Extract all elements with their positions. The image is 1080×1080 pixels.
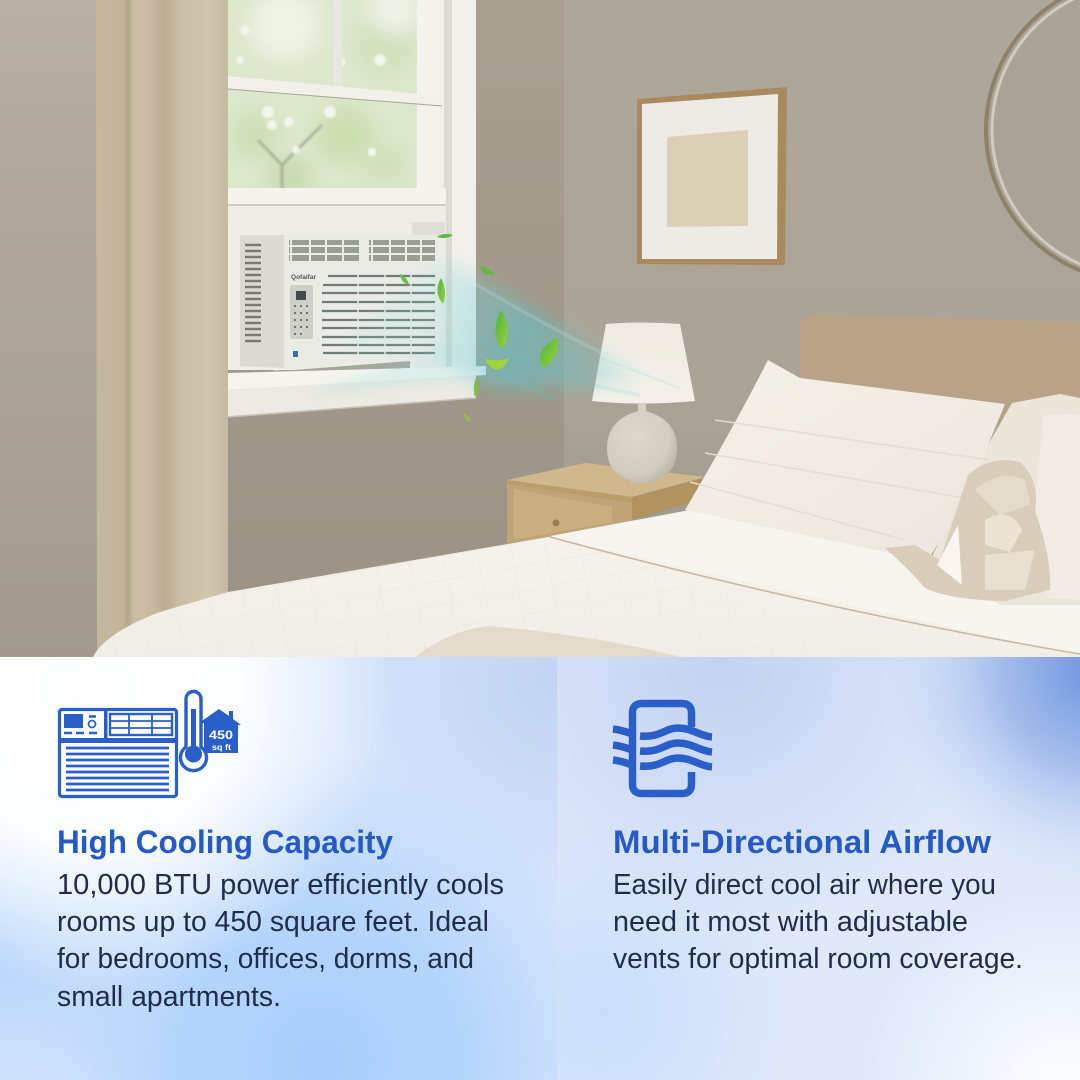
- body text: Easily direct cool air where you: [613, 869, 996, 901]
- vent outline: [632, 704, 692, 794]
- quilting: [93, 535, 900, 657]
- window sill: [228, 366, 486, 417]
- meeting rail: [228, 76, 417, 104]
- leaf: [485, 358, 509, 370]
- throw blanket: [415, 626, 680, 657]
- lower vent lines: [66, 748, 169, 790]
- glass with blurred trees: [228, 0, 417, 188]
- brand logo: Qofaifar: [291, 274, 316, 281]
- curtain: [96, 0, 228, 650]
- pillow: [685, 360, 1005, 557]
- air conditioner unit: [240, 235, 437, 376]
- house: [199, 709, 241, 753]
- sheet fold: [550, 510, 1080, 655]
- wall art frame: [637, 87, 787, 265]
- centre wall under window: [228, 0, 564, 592]
- white mat: [642, 94, 778, 259]
- flying leaves: [400, 234, 558, 422]
- heading: Multi-Directional Airflow: [613, 824, 991, 860]
- right wall: [564, 0, 1080, 556]
- body text: need it most with adjustable: [613, 906, 968, 938]
- side accordion: [412, 222, 445, 236]
- body text: rooms up to 450 square feet. Ideal: [57, 906, 489, 938]
- main grille: [322, 276, 435, 353]
- duvet: [93, 536, 1080, 657]
- leaf: [400, 274, 409, 285]
- left wall: [0, 0, 98, 657]
- vase: [607, 404, 677, 483]
- icon: air conditioner with thermometer and house: [59, 692, 241, 796]
- leaf: [479, 265, 494, 275]
- bottom lip: [278, 361, 410, 372]
- display: [64, 714, 83, 728]
- headboard: [800, 314, 1080, 420]
- control panel: [290, 285, 313, 339]
- lower sash bottom rail: [228, 188, 446, 204]
- icon: airflow through vent: [613, 704, 712, 794]
- shade: [592, 322, 695, 404]
- side vents: [245, 245, 261, 341]
- leaf: [437, 278, 445, 304]
- panel background: [0, 657, 557, 1080]
- nightstand: [507, 463, 705, 543]
- house sublabel: sq ft: [212, 743, 231, 752]
- panel: bedroom photo scene: [0, 0, 1080, 657]
- table lamp: [592, 322, 695, 483]
- leaf: [437, 234, 453, 238]
- round mirror: [986, 0, 1080, 282]
- window frame: [228, 0, 444, 370]
- front: [507, 484, 633, 543]
- plush toy: [885, 460, 1050, 601]
- top vents: [110, 714, 172, 735]
- body text: vents for optimal room coverage.: [613, 943, 1023, 975]
- body text: [613, 869, 1023, 975]
- energy badge: [293, 351, 298, 357]
- house label: 450: [209, 730, 233, 742]
- right sash reveal: [417, 0, 440, 196]
- body text: small apartments.: [57, 981, 281, 1013]
- window: [228, 0, 476, 370]
- panel: multi-directional airflow: [557, 657, 1080, 1080]
- top grilles: [289, 240, 435, 261]
- body text: [57, 869, 504, 1013]
- airflow stream: [300, 258, 680, 400]
- vertical muntin: [333, 0, 342, 88]
- leaf: [496, 310, 508, 349]
- wood frame: [637, 87, 787, 265]
- AC outline: [60, 710, 176, 796]
- leaf: [463, 413, 471, 422]
- side: [632, 478, 705, 520]
- front housing: [272, 235, 437, 371]
- thermometer: [180, 692, 206, 771]
- body text: 10,000 BTU power efficiently cools: [57, 869, 504, 901]
- leaf: [474, 378, 479, 397]
- side housing: [240, 235, 285, 368]
- artwork: [667, 130, 748, 227]
- left wave stubs: [613, 729, 632, 765]
- bedding: [93, 510, 1080, 657]
- back pillows: [930, 394, 1080, 605]
- top: [507, 463, 705, 497]
- heading: High Cooling Capacity: [57, 824, 393, 860]
- body text: for bedrooms, offices, dorms, and: [57, 943, 474, 975]
- leaf: [540, 337, 558, 368]
- panel: high cooling capacity: [0, 657, 557, 1080]
- wave lines: [640, 728, 712, 737]
- panel background: [557, 657, 1080, 1080]
